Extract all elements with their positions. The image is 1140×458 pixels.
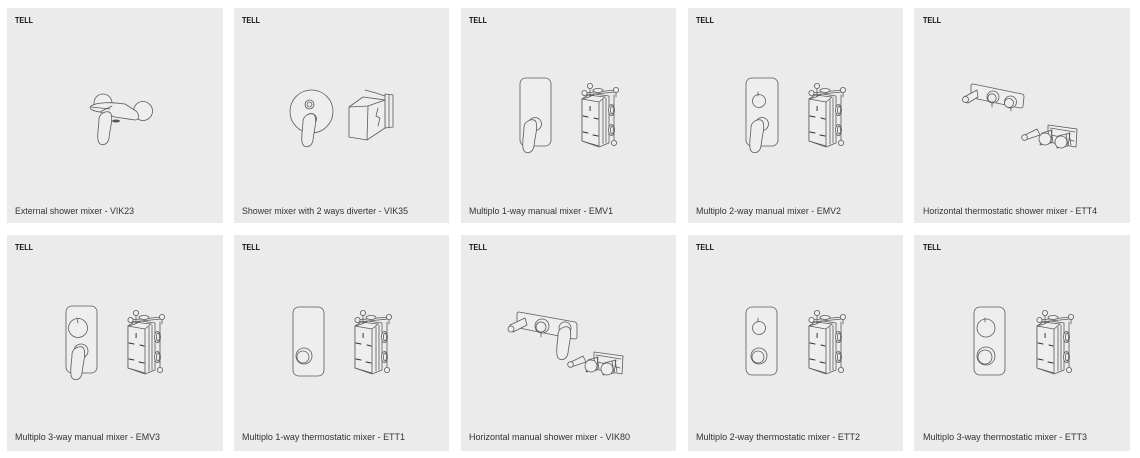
illustration: round plate and box [290, 90, 393, 147]
caption: Multiplo 3-way thermostatic mixer - ETT3 [923, 432, 1087, 443]
card: Multiplo 2-way manual mixer [688, 8, 903, 223]
card: Multiplo 1-way manual mixer [461, 8, 676, 223]
caption: Multiplo 3-way manual mixer - EMV3 [15, 432, 160, 443]
card: Multiplo 3-way thermostatic mixer [914, 235, 1130, 451]
brand label: TELL [923, 15, 941, 25]
illustration: plate, handle, box [520, 78, 619, 153]
caption: Multiplo 1-way thermostatic mixer - ETT1 [242, 432, 405, 443]
brand label: TELL [15, 15, 33, 25]
brand label: TELL [242, 15, 260, 25]
card: Horizontal thermostatic shower mixer [914, 8, 1130, 223]
caption: Multiplo 2-way manual mixer - EMV2 [696, 206, 841, 217]
illustration: plate, two knobs, box [746, 307, 846, 375]
brand label: TELL [696, 242, 714, 252]
brand label: TELL [469, 242, 487, 252]
illustration: external mixer [90, 94, 152, 145]
caption: Horizontal manual shower mixer - VIK80 [469, 432, 630, 443]
brand label: TELL [923, 242, 941, 252]
brand label: TELL [15, 242, 33, 252]
brand label: TELL [469, 15, 487, 25]
illustration: plate, knob, handle, box [746, 78, 846, 153]
card: Horizontal manual shower mixer [461, 235, 676, 451]
illustration: plate, dial, handle, box [66, 306, 165, 380]
illustration: plate, two dials, box [974, 307, 1074, 375]
card: External shower mixer [7, 8, 223, 223]
card: Multiplo 1-way thermostatic mixer [234, 235, 449, 451]
caption: Horizontal thermostatic shower mixer - ETT4 [923, 206, 1097, 217]
caption: Multiplo 2-way thermostatic mixer - ETT2 [696, 432, 860, 443]
brand label: TELL [696, 15, 714, 25]
illustration: horizontal plate, handle and rough-in [508, 312, 623, 375]
illustration: horizontal plate and rough-in [962, 84, 1077, 148]
brand label: TELL [242, 242, 260, 252]
card: Multiplo 2-way thermostatic mixer [688, 235, 903, 451]
caption: Multiplo 1-way manual mixer - EMV1 [469, 206, 613, 217]
caption: Shower mixer with 2 ways diverter - VIK35 [242, 206, 408, 217]
card: Multiplo 3-way manual mixer [7, 235, 223, 451]
card: Shower mixer with 2 ways diverter [234, 8, 449, 223]
caption: External shower mixer - VIK23 [15, 206, 134, 217]
illustration: plate, knob, box [293, 307, 392, 376]
